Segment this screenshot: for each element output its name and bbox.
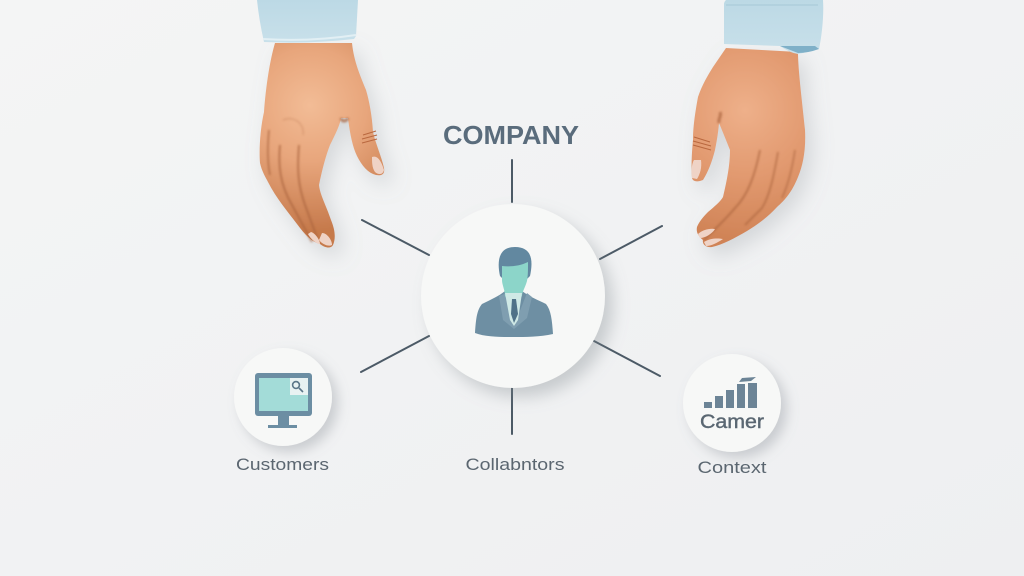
left hand nails [308,157,384,246]
businessman body [475,291,553,337]
monitor search tab [290,378,308,395]
left cuff [257,0,358,43]
monitor stand [268,416,297,428]
left hand skin [260,43,384,248]
context circle [683,354,781,452]
circle text: camer: Camer [700,412,765,433]
businessman shirt [505,293,522,326]
title: COMPANY [443,120,579,150]
right hand [692,48,805,247]
left thumb creases [362,131,377,143]
monitor screen [259,378,308,411]
right hand finger shading [704,112,795,240]
right thumb creases [693,137,711,150]
label: collaborators: Collabntors [466,455,564,474]
label: customers: Customers [236,455,329,474]
right cuff [724,0,823,54]
monitor frame [255,373,312,416]
center circle [421,204,605,388]
businessman hair [499,247,531,280]
left hand [260,43,384,248]
icon: bar chart [704,377,757,408]
connector lines [361,160,662,434]
businessman lapels [499,293,532,329]
businessman face [502,262,528,310]
icon: monitor [255,373,312,428]
left hand finger shading [268,118,348,242]
label: context: Context [698,458,767,477]
right hand skin [692,48,805,247]
magnifier [293,382,303,392]
businessman tie [511,299,518,323]
customers circle [234,348,332,446]
right hand nails [692,160,723,246]
icon: businessman [475,247,553,337]
